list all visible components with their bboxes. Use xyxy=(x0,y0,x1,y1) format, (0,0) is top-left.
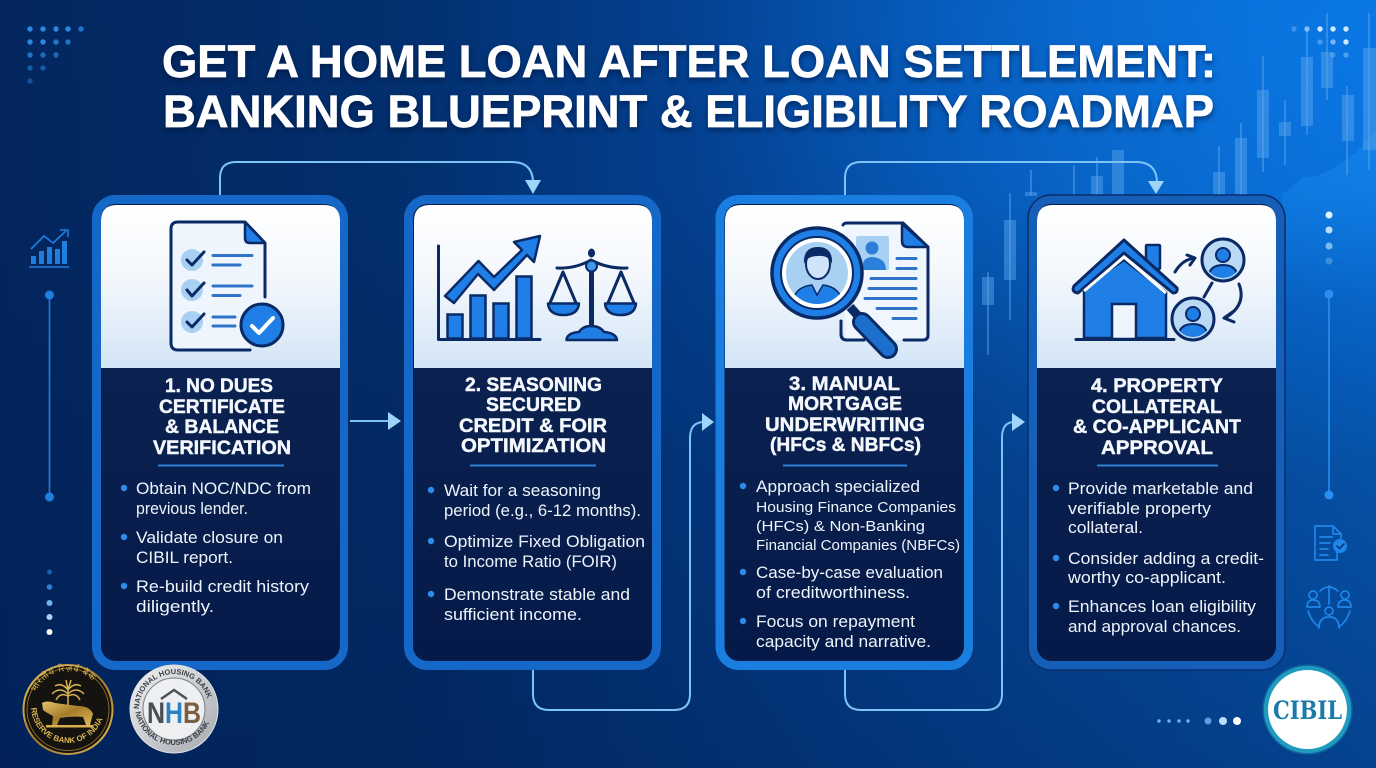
heading: step 4 xyxy=(1073,375,1241,459)
bullets: step 1: Obtain NOC/NDC from xyxy=(136,480,311,498)
bullets: step 4: collateral. xyxy=(1068,519,1143,537)
heading: step 2 xyxy=(459,374,607,457)
bullets: step 3: of creditworthiness. xyxy=(756,584,910,602)
heading: step 3: UNDERWRITING xyxy=(765,414,925,436)
bullets: step 1: CIBIL report. xyxy=(136,549,233,567)
logo: NHB seal: B xyxy=(183,697,201,730)
connector: step 3 to step 4 bottom xyxy=(845,413,1025,710)
panel: step 1 xyxy=(96,200,344,666)
heading: step 4: APPROVAL xyxy=(1101,437,1213,459)
bullets: step 3: Financial Companies (NBFCs) xyxy=(756,537,960,554)
heading: step 1: VERIFICATION xyxy=(153,437,291,459)
logo: NHB seal: NATIONAL HOUSING BANK xyxy=(134,668,212,709)
bullets: step 2: Optimize Fixed Obligation xyxy=(444,533,645,551)
timeline left xyxy=(45,290,54,502)
bullets: step 2: Demonstrate stable and xyxy=(444,586,630,604)
logo: RBI seal: भारतीय रिज़र्व बैंक xyxy=(31,664,96,690)
heading: step 3: 3. MANUAL xyxy=(789,373,900,395)
heading: step 1: 1. NO DUES xyxy=(165,375,273,397)
dots bottom right xyxy=(1157,717,1241,725)
dots left xyxy=(46,570,52,635)
heading: step 2: OPTIMIZATION xyxy=(461,435,606,457)
bullets: step 4: worthy co-applicant. xyxy=(1067,569,1226,587)
bullets: step 4 xyxy=(1053,480,1264,636)
heading: step 4: & CO-APPLICANT xyxy=(1073,416,1241,438)
dot grid top right xyxy=(1291,26,1349,58)
timeline right xyxy=(1324,290,1334,500)
bullets: step 3: Case-by-case evaluation xyxy=(756,564,943,582)
icon: small document check right xyxy=(1315,526,1347,560)
icon: small growth chart left xyxy=(29,230,69,267)
bullets: step 1: diligently. xyxy=(136,598,214,616)
dot grid top left xyxy=(27,26,84,84)
bullets: step 2 xyxy=(428,482,645,624)
connector: step 3 to step 4 top xyxy=(845,162,1164,195)
bullets: step 4: verifiable property xyxy=(1068,500,1212,518)
icon: magnifier over profile document xyxy=(772,223,928,349)
bullets: step 3: Focus on repayment xyxy=(756,613,915,631)
bullets: step 2: Wait for a seasoning xyxy=(444,482,601,500)
bullets: step 3: (HFCs) & Non-Banking xyxy=(756,518,925,535)
heading: step 4: COLLATERAL xyxy=(1092,396,1222,418)
bullets: step 3: Approach specialized xyxy=(756,478,920,496)
logo: NHB seal xyxy=(130,664,218,754)
logo: RBI seal xyxy=(22,664,114,755)
bullets: step 1: previous lender. xyxy=(136,500,248,518)
panel: step 3 xyxy=(720,200,968,666)
dots right xyxy=(1326,212,1332,264)
title xyxy=(162,36,1216,137)
logo: NHB seal: NATIONAL HOUSING BANK xyxy=(136,711,210,745)
arrow: step 1 to step 2 side xyxy=(350,412,401,430)
icon: house with co-applicants xyxy=(1073,239,1244,340)
logo: RBI seal: RESERVE BANK OF INDIA xyxy=(31,708,103,743)
panel: step 2 xyxy=(408,200,656,666)
title: GET A HOME LOAN AFTER LOAN SETTLEMENT: xyxy=(162,36,1216,87)
bullets: step 1: Re-build credit history xyxy=(136,578,310,596)
logo: NHB seal: H xyxy=(165,697,183,730)
bullets: step 4: Provide marketable and xyxy=(1068,480,1253,498)
bullets: step 2: sufficient income. xyxy=(444,606,582,624)
bullets: step 2: to Income Ratio (FOIR) xyxy=(444,553,617,571)
logo: NHB seal: N xyxy=(147,697,165,730)
icon: checklist document xyxy=(171,222,283,350)
logo: CIBIL xyxy=(1263,665,1352,754)
heading: step 2: SECURED xyxy=(486,394,581,416)
bullets: step 3 xyxy=(740,478,960,651)
connector: step 1 to step 2 top xyxy=(220,162,541,195)
icon: small team balance right xyxy=(1307,586,1351,628)
heading: step 4: 4. PROPERTY xyxy=(1091,375,1223,397)
title: BANKING BLUEPRINT & ELIGIBILITY ROADMAP xyxy=(163,86,1214,137)
panel: step 4 xyxy=(1028,195,1285,670)
heading: step 1: CERTIFICATE xyxy=(159,396,285,418)
bullets: step 4: and approval chances. xyxy=(1068,618,1241,636)
heading: step 3: (HFCs & NBFCs) xyxy=(770,434,921,456)
icon: bar chart with scales xyxy=(438,236,636,340)
heading: step 3 xyxy=(765,373,925,456)
heading: step 2: 2. SEASONING xyxy=(465,374,602,396)
bullets: step 4: Enhances loan eligibility xyxy=(1068,598,1257,616)
background candlestick chart xyxy=(982,13,1376,355)
bullets: step 4: Consider adding a credit- xyxy=(1068,550,1264,568)
heading: step 1 xyxy=(153,375,291,459)
connector: step 2 to step 3 bottom xyxy=(533,413,714,710)
heading: step 2: CREDIT & FOIR xyxy=(459,415,607,437)
bullets: step 3: capacity and narrative. xyxy=(756,633,931,651)
logo: CIBIL: CIBIL xyxy=(1273,696,1342,725)
bullets: step 1 xyxy=(121,480,311,616)
heading: step 1: & BALANCE xyxy=(165,416,279,438)
bullets: step 2: period (e.g., 6-12 months). xyxy=(444,502,641,520)
bullets: step 3: Housing Finance Companies xyxy=(756,499,956,516)
heading: step 3: MORTGAGE xyxy=(788,393,902,415)
bullets: step 1: Validate closure on xyxy=(136,529,283,547)
